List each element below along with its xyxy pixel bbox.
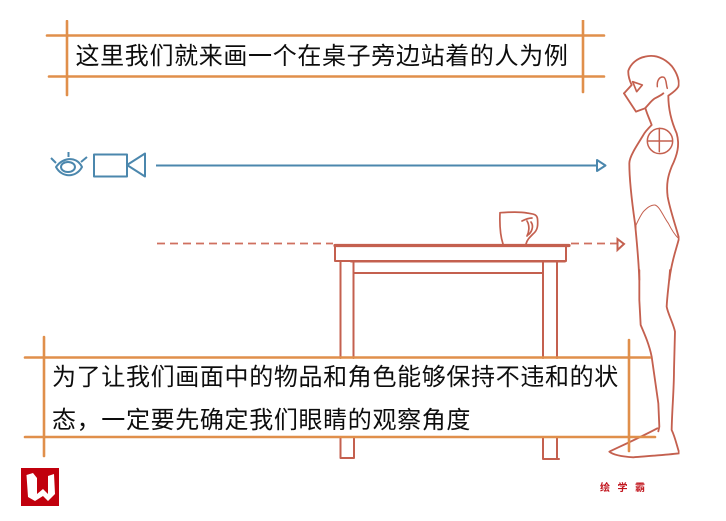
arrow: blue line of sight (156, 160, 606, 171)
logo (21, 468, 59, 506)
heading banner (47, 20, 604, 95)
heading text: 这里我们就来画一个在桌子旁边站着的人为例 (76, 43, 568, 70)
arrow: red dashed line of sight (157, 239, 624, 250)
icon: camera (94, 154, 145, 176)
icon: eye (51, 152, 87, 175)
icon: cup (500, 212, 538, 244)
table (335, 246, 569, 459)
figure: standing person (609, 56, 679, 457)
explanation text: 态，一定要先确定我们眼睛的观察角度 (52, 407, 471, 434)
brand text: 绘学霸 (600, 481, 652, 494)
explanation banner (25, 337, 655, 456)
explanation text: 为了让我们画面中的物品和角色能够保持不违和的状 (52, 364, 619, 391)
